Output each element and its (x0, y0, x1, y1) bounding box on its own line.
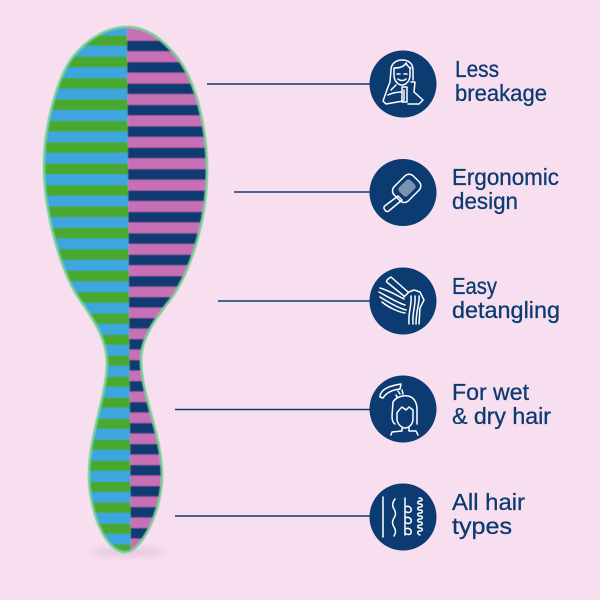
hairbrush (42, 25, 209, 558)
feature: less breakage (370, 50, 547, 118)
feature: easy detangling (370, 268, 560, 334)
brush right half stripes (126, 28, 207, 550)
label: easy detangling: detangling (452, 297, 560, 323)
label: for wet and dry hair: For wet (452, 379, 530, 405)
icon: paddle brush (370, 159, 436, 226)
feature: all hair types (370, 484, 525, 550)
icon: shower on hair (370, 376, 436, 442)
label: ergonomic design: design (452, 188, 518, 214)
brush left half stripes (44, 28, 132, 552)
label: all hair types: types (452, 513, 512, 539)
label: all hair types: All hair (452, 489, 525, 515)
label: ergonomic design: Ergonomic (452, 164, 559, 190)
label: for wet and dry hair: & dry hair (452, 403, 551, 429)
connector lines (175, 84, 372, 516)
icon: hair type lines (370, 484, 436, 550)
icon: woman holding brush (370, 50, 436, 118)
label: easy detangling: Easy (452, 273, 497, 299)
feature: ergonomic design (370, 159, 559, 226)
label: less breakage: Less (455, 56, 499, 82)
label: less breakage: breakage (455, 80, 547, 106)
icon: hair and comb (370, 268, 436, 334)
feature: for wet and dry hair (370, 376, 551, 442)
